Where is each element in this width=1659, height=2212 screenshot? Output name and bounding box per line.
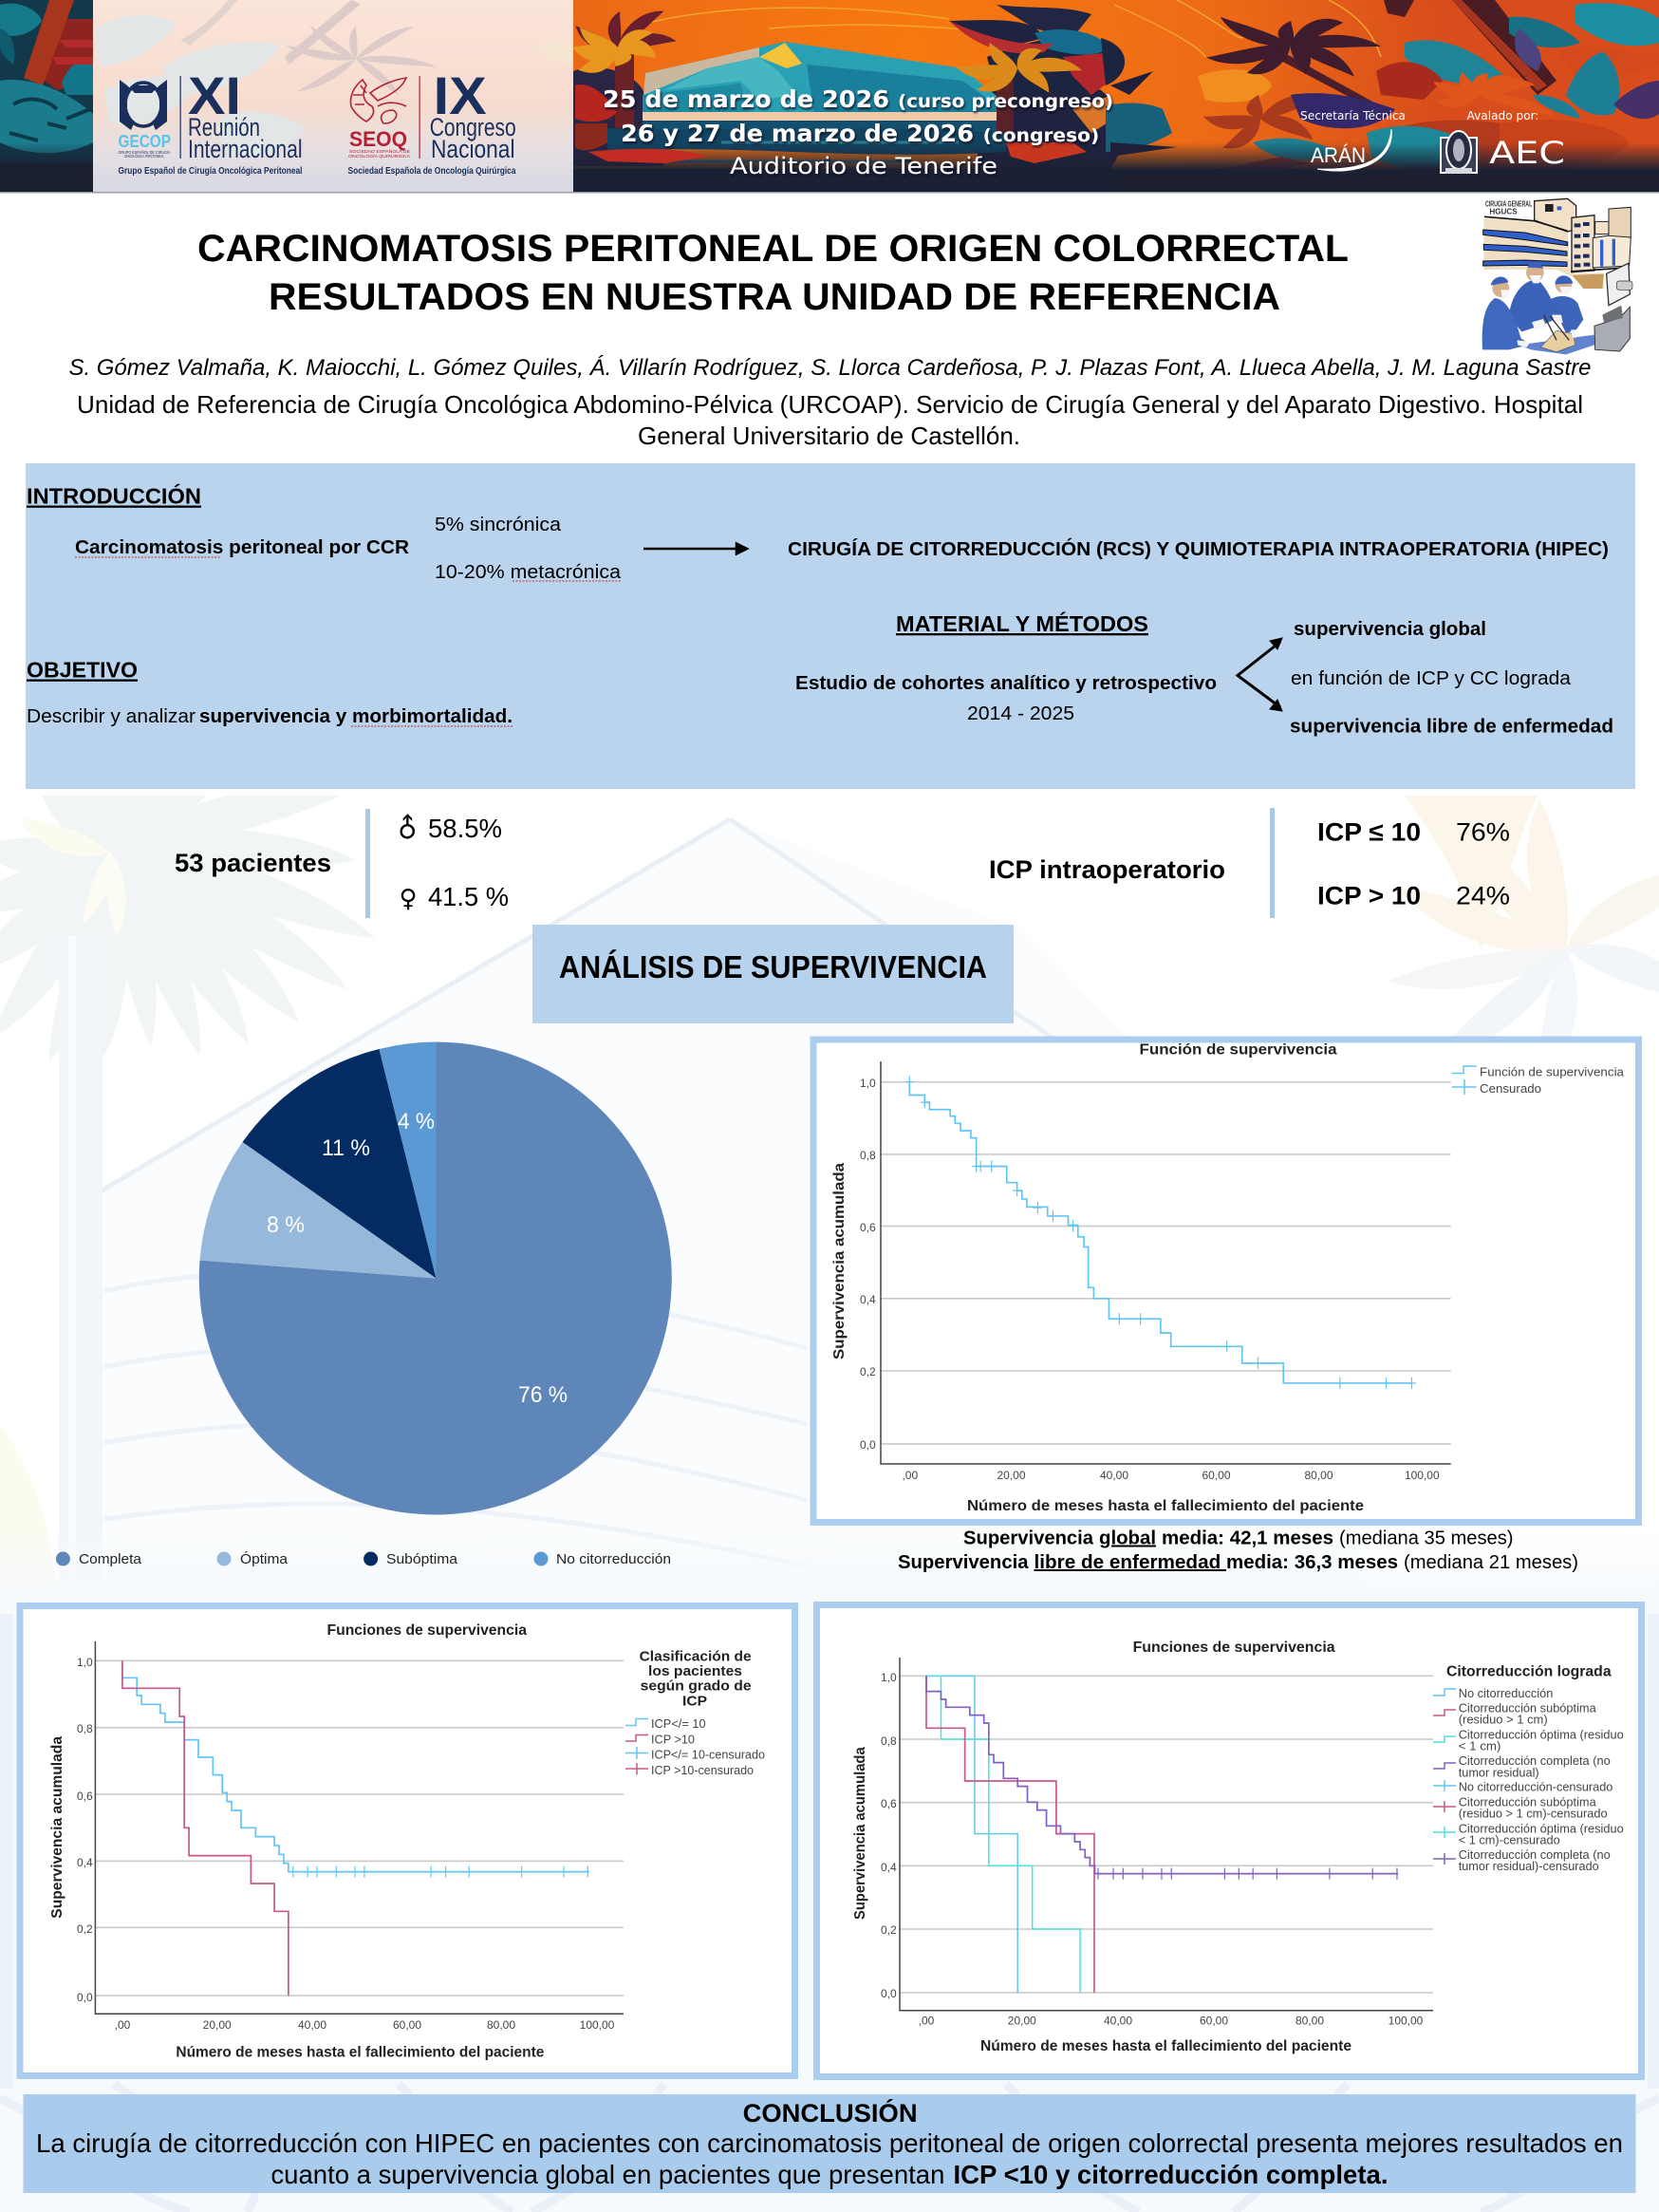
pie labels: 11 % xyxy=(322,1135,370,1161)
heading: material y métodos: MATERIAL Y MÉTODOS xyxy=(896,610,1148,636)
arrow: to treatment xyxy=(643,543,747,554)
slice: no citorreducción xyxy=(380,1042,437,1278)
sponsors: Avalado por: xyxy=(1467,109,1539,122)
logo: GECOP: Internacional xyxy=(188,135,302,163)
text: objective: Describir y analizar xyxy=(27,706,196,727)
legend: ICP</= 10-censurado xyxy=(651,1748,765,1762)
pie labels xyxy=(267,1109,568,1408)
survival curve xyxy=(905,1077,1416,1389)
text: study design: 2014 - 2025 xyxy=(967,703,1074,724)
slice: óptima xyxy=(199,1142,437,1278)
illustration: volcano and central foliage xyxy=(570,2,1122,193)
text: study design xyxy=(795,673,1217,724)
logo: GECOP: Grupo Español de Cirugía Oncológica Peritoneal xyxy=(118,165,303,177)
legend: ICP</= 10 xyxy=(651,1716,706,1731)
sponsors xyxy=(1300,109,1565,174)
event dates: 25 de marzo de 2026 xyxy=(603,85,889,113)
legend: Censurado xyxy=(1480,1081,1541,1096)
chart: survival by cytoreduction: 60,00 xyxy=(1200,2015,1228,2028)
slice: completa xyxy=(199,1042,672,1514)
background watermark: tropical illustration xyxy=(0,716,1659,2212)
stat: intraoperative ICP: ICP ≤ 10 xyxy=(1317,818,1421,847)
text: survival results: media: 42,1 meses xyxy=(1162,1528,1333,1549)
event dates: (curso precongreso) xyxy=(898,91,1113,112)
chart: survival by cytoreduction: 0,6 xyxy=(881,1797,897,1810)
panel: conclusion xyxy=(23,2094,1636,2193)
text: survival results: (mediana 21 meses) xyxy=(1404,1552,1578,1573)
text: types xyxy=(435,515,622,583)
legend xyxy=(1452,1065,1625,1096)
icon: surgery team illustration: CIRUGIA GENERAL xyxy=(1485,199,1532,208)
stat: patients by sex: 58.5% xyxy=(428,814,502,843)
legend: ICP >10-censurado xyxy=(651,1763,754,1777)
heading: objetivo: OBJETIVO xyxy=(27,657,138,682)
chart: survival by ICP: Número de meses hasta el fallecimiento del paciente xyxy=(176,2045,544,2061)
legend: tumor residual) xyxy=(1459,1765,1539,1779)
legend: Citorreducción completa (no xyxy=(1459,1847,1611,1862)
chart: survival by cytoreduction: 100,00 xyxy=(1389,2015,1424,2028)
authors: S. Gómez Valmaña, K. Maiocchi, L. Gómez Quiles, Á. Villarín Rodríguez, S. Llorca Cardeñosa, P. J. Plazas Font, A. Llueca Abella, J. M. Laguna Sastre xyxy=(68,355,1591,381)
panel: conclusion: ICP <10 y citorreducción completa. xyxy=(953,2160,1388,2189)
chart: survival by ICP: 1,0 xyxy=(77,1656,93,1669)
legend: tumor residual)-censurado xyxy=(1459,1859,1599,1873)
stat: intraoperative ICP: ICP > 10 xyxy=(1317,881,1421,909)
legend: Citorreducción óptima (residuo xyxy=(1459,1821,1624,1835)
heading: análisis de supervivencia: ANÁLISIS DE SUPERVIVENCIA xyxy=(559,949,987,984)
chart: survival by ICP: Supervivencia acumulada xyxy=(49,1736,65,1919)
chart: survival by ICP xyxy=(20,1606,795,2075)
chart: overall survival: 0,4 xyxy=(860,1293,876,1306)
chart: overall survival: 0,0 xyxy=(860,1438,876,1452)
text: survival results xyxy=(898,1528,1578,1573)
text: endpoints: supervivencia libre de enfermedad xyxy=(1290,716,1613,737)
text: carcinomatosis: Carcinomatosis peritoneal por CCR xyxy=(75,536,409,558)
logo: SEOQ: ONCOLOGÍA QUIRÚRGICA xyxy=(348,153,411,159)
legend: Citorreducción lograda xyxy=(1446,1663,1612,1679)
banner pale logo panel xyxy=(93,0,573,193)
affiliation xyxy=(77,390,1583,450)
stat: patients by sex: 53 pacientes xyxy=(175,849,331,877)
text: types: 5% sincrónica xyxy=(435,515,562,535)
logo: SEOQ: IX xyxy=(434,66,487,125)
chart: overall survival: Función de supervivencia xyxy=(1139,1042,1337,1058)
chart: survival by ICP: 40,00 xyxy=(298,2018,326,2032)
legend: (residuo > 1 cm)-censurado xyxy=(1459,1807,1608,1821)
chart: survival by ICP: 0,4 xyxy=(77,1856,93,1869)
chart: survival by ICP: Funciones de supervivencia xyxy=(326,1622,527,1639)
chart: overall survival: ,00 xyxy=(902,1469,918,1482)
legend: Citorreducción óptima (residuo xyxy=(1459,1727,1624,1741)
text: objective xyxy=(27,706,513,727)
heading: análisis de supervivencia xyxy=(532,925,1014,1023)
chart: survival by cytoreduction: 0,2 xyxy=(881,1923,897,1937)
legend xyxy=(625,1648,765,1777)
chart: overall survival: 20,00 xyxy=(997,1469,1026,1482)
arrows: split xyxy=(1238,638,1282,711)
text: survival results: media: 36,3 meses xyxy=(1226,1552,1398,1573)
pie legend: Subóptima xyxy=(386,1551,458,1567)
pie legend: Completa xyxy=(79,1551,142,1567)
text: survival results: Supervivencia xyxy=(963,1528,1094,1549)
legend: según grado de xyxy=(641,1678,752,1695)
stat: patients by sex: 41.5 % xyxy=(428,882,509,911)
event dates xyxy=(603,85,1113,179)
logo: GECOP: Reunión xyxy=(188,113,260,141)
chart: survival by ICP: 60,00 xyxy=(393,2018,421,2032)
chart: survival by ICP: 0,6 xyxy=(77,1790,93,1803)
chart: survival by cytoreduction: Funciones de supervivencia xyxy=(1133,1640,1335,1656)
logo: SEOQ: SEOQ xyxy=(349,127,407,151)
chart: overall survival: 0,2 xyxy=(860,1365,876,1378)
event dates: 26 y 27 de marzo de 2026 xyxy=(621,120,974,147)
text: survival results: libre de enfermedad xyxy=(1035,1552,1226,1573)
legend: Función de supervivencia xyxy=(1480,1065,1625,1078)
chart: survival by ICP: 0,0 xyxy=(77,1991,93,2004)
chart: survival by ICP: 100,00 xyxy=(580,2018,615,2032)
chart: overall survival xyxy=(813,1040,1638,1523)
chart: survival by cytoreduction: 20,00 xyxy=(1008,2015,1036,2028)
white header area xyxy=(0,193,1659,796)
chart: overall survival: Supervivencia acumulada xyxy=(831,1163,848,1359)
chart: overall survival: 0,8 xyxy=(860,1149,876,1162)
legend: (residuo > 1 cm) xyxy=(1459,1713,1548,1727)
logo: SEOQ xyxy=(347,66,516,177)
text: survival results: global xyxy=(1099,1528,1156,1549)
chart: survival by cytoreduction: 0,0 xyxy=(881,1987,897,2000)
chart: survival by cytoreduction: Supervivencia acumulada xyxy=(852,1747,868,1920)
legend: < 1 cm) xyxy=(1459,1738,1501,1753)
icon: surgery team illustration xyxy=(1482,198,1632,354)
chart: overall survival: 100,00 xyxy=(1405,1469,1440,1482)
pie labels: 76 % xyxy=(518,1382,568,1408)
chart: survival by cytoreduction: 1,0 xyxy=(881,1671,897,1684)
legend: < 1 cm)-censurado xyxy=(1459,1832,1560,1846)
stat: patients by sex xyxy=(175,809,509,918)
text: endpoints: supervivencia global xyxy=(1294,619,1486,640)
chart: survival by ICP: 0,8 xyxy=(77,1722,93,1735)
survival curves xyxy=(926,1676,1398,1993)
survival curves xyxy=(122,1660,589,1996)
pie legend xyxy=(56,1551,671,1567)
chart: overall survival: Número de meses hasta el fallecimiento del paciente xyxy=(967,1498,1364,1514)
event dates: (congreso) xyxy=(983,125,1099,146)
logo: GECOP xyxy=(118,66,303,177)
stat: intraoperative ICP xyxy=(989,808,1510,918)
sponsors: ARÁN xyxy=(1311,143,1366,167)
logo: GECOP: GECOP xyxy=(118,132,171,151)
logo: GECOP: ONCOLÓGICA PERITONEAL xyxy=(124,153,164,159)
pie legend: No citorreducción xyxy=(556,1551,671,1567)
chart: overall survival: 80,00 xyxy=(1304,1469,1333,1482)
legend: Citorreducción subóptima xyxy=(1459,1795,1596,1809)
chart: survival by cytoreduction: 0,8 xyxy=(881,1734,897,1748)
event dates: Auditorio de Tenerife xyxy=(730,153,997,179)
text: survival results: (mediana 35 meses) xyxy=(1339,1528,1513,1549)
logo: SEOQ: Nacional xyxy=(431,135,514,163)
pie labels: 4 % xyxy=(398,1109,435,1134)
chart: survival by cytoreduction: 80,00 xyxy=(1296,2015,1324,2028)
banner foliage left strip xyxy=(0,0,93,193)
title xyxy=(197,228,1349,318)
legend: Citorreducción subóptima xyxy=(1459,1701,1596,1715)
icon: surgery team illustration: HGUCS xyxy=(1489,206,1518,216)
chart: survival by cytoreduction: 40,00 xyxy=(1104,2015,1132,2028)
stat: intraoperative ICP: 76% xyxy=(1456,818,1510,847)
legend: los pacientes xyxy=(648,1663,742,1679)
legend: ICP >10 xyxy=(651,1733,695,1747)
logo: SEOQ: SOCIEDAD ESPAÑOLA DE xyxy=(349,148,410,155)
logo: SEOQ: Sociedad Española de Oncología Quirúrgica xyxy=(347,165,516,177)
title: RESULTADOS EN NUESTRA UNIDAD DE REFERENCIA xyxy=(269,276,1280,318)
chart: survival by cytoreduction: 0,4 xyxy=(881,1861,897,1874)
chart: survival by cytoreduction xyxy=(816,1604,1642,2077)
text: survival results: Supervivencia xyxy=(898,1552,1029,1573)
legend xyxy=(1433,1663,1624,1873)
chart: survival by ICP: 80,00 xyxy=(487,2018,515,2032)
legend: No citorreducción-censurado xyxy=(1459,1780,1612,1794)
affiliation: General Universitario de Castellón. xyxy=(638,422,1020,450)
pie labels: 8 % xyxy=(267,1212,305,1238)
panel: conclusion: cuanto a supervivencia global en pacientes que presentan xyxy=(270,2160,944,2189)
illustration: right foliage xyxy=(1101,0,1659,193)
chart: overall survival: 0,6 xyxy=(860,1221,876,1234)
sponsors: AEC xyxy=(1489,135,1565,171)
affiliation: Unidad de Referencia de Cirugía Oncológica Abdomino-Pélvica (URCOAP). Servicio de Cirugía General y del Aparato Digestivo. Hospital xyxy=(77,390,1583,419)
legend: No citorreducción xyxy=(1459,1686,1553,1700)
chart: survival by ICP: 20,00 xyxy=(203,2018,232,2032)
chart: survival by cytoreduction: Número de meses hasta el fallecimiento del paciente xyxy=(980,2038,1351,2054)
stat: intraoperative ICP: 24% xyxy=(1456,881,1510,909)
legend: Citorreducción completa (no xyxy=(1459,1753,1611,1768)
title: CARCINOMATOSIS PERITONEAL DE ORIGEN COLORRECTAL xyxy=(197,228,1349,270)
logo: GECOP: XI xyxy=(188,66,241,125)
stat: patients by sex: ♂ xyxy=(388,809,427,848)
logo: SEOQ: Congreso xyxy=(430,113,516,141)
banner xyxy=(0,0,1659,194)
chart: survival by cytoreduction: ,00 xyxy=(919,2015,935,2028)
legend: Clasificación de xyxy=(640,1648,752,1664)
chart: cytoreduction pie xyxy=(56,1042,672,1567)
text: objective: supervivencia y morbimortalidad. xyxy=(199,706,513,727)
text: endpoints xyxy=(1290,619,1613,737)
slice: subóptima xyxy=(243,1049,437,1278)
text: study design: Estudio de cohortes analítico y retrospectivo xyxy=(795,673,1217,694)
stat: patients by sex: ♀ xyxy=(399,885,418,913)
legend: ICP xyxy=(682,1693,707,1709)
chart: survival by ICP: ,00 xyxy=(115,2018,131,2032)
chart: survival by ICP: 0,2 xyxy=(77,1922,93,1936)
panel: conclusion: CONCLUSIÓN xyxy=(743,2098,918,2128)
panel: introduction, objective, methods xyxy=(26,463,1635,789)
pie legend: Óptima xyxy=(240,1551,289,1567)
sponsors: Secretaría Técnica xyxy=(1300,109,1406,122)
text: endpoints: en función de ICP y CC lograda xyxy=(1291,668,1572,689)
panel: conclusion: La cirugía de citorreducción con HIPEC en pacientes con carcinomatosis peritoneal de origen colorrectal presenta mejores resultados en xyxy=(36,2128,1623,2158)
banner sky background xyxy=(0,0,1659,193)
text: types: 10-20% metacrónica xyxy=(435,562,622,583)
text: treatment: CIRUGÍA DE CITORREDUCCIÓN (RCS) Y QUIMIOTERAPIA INTRAOPERATORIA (HIPEC) xyxy=(788,537,1609,560)
chart: overall survival: 1,0 xyxy=(860,1077,876,1090)
logo: GECOP: GRUPO ESPAÑOL DE CIRUGÍA xyxy=(118,149,171,155)
chart: overall survival: 40,00 xyxy=(1100,1469,1128,1482)
chart: overall survival: 60,00 xyxy=(1202,1469,1231,1482)
heading: introducción: INTRODUCCIÓN xyxy=(27,482,201,509)
stat: intraoperative ICP: ICP intraoperatorio xyxy=(989,855,1225,884)
